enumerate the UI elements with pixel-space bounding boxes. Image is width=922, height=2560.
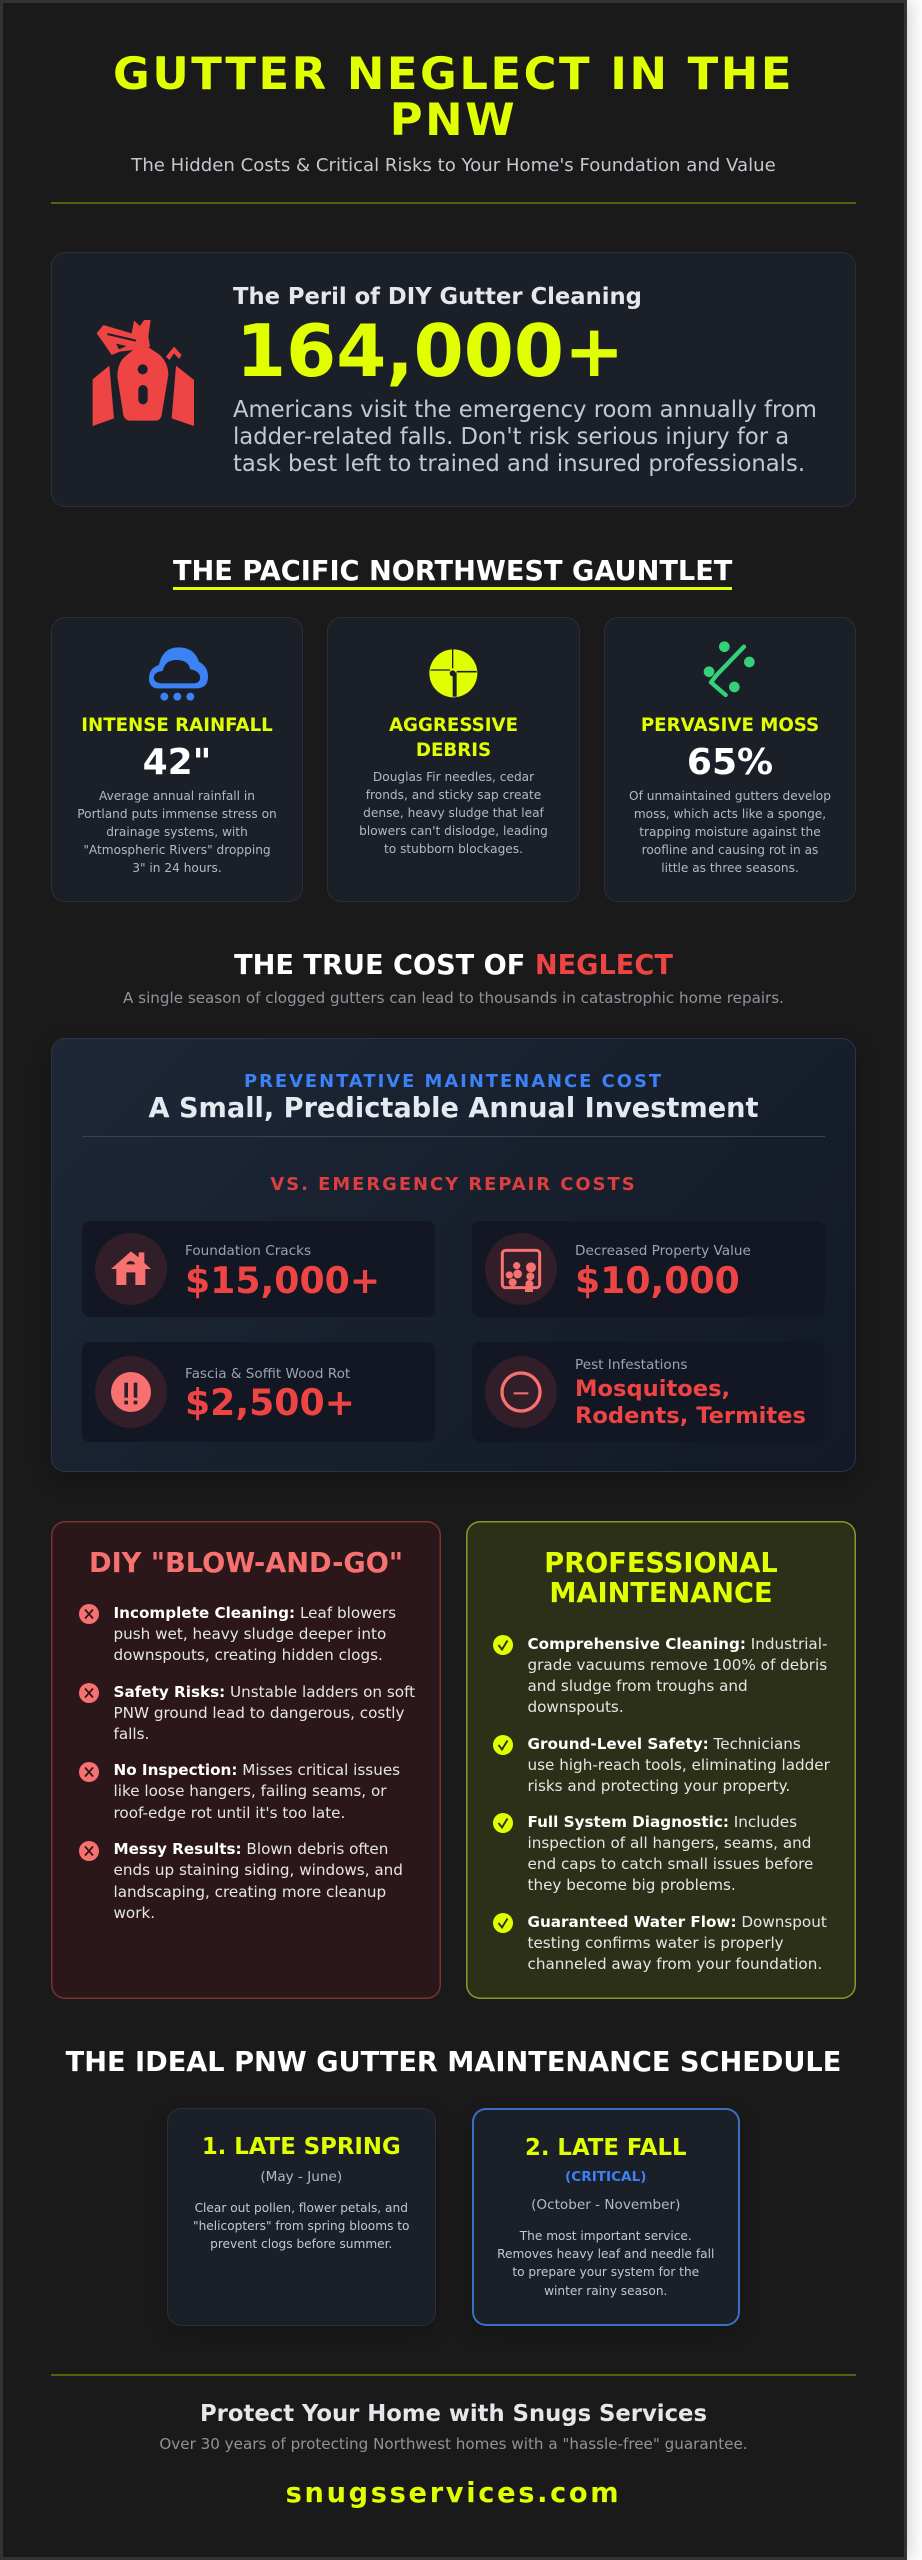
item text: Incomplete Cleaning: Leaf blowers (114, 1604, 396, 1622)
schedule text: "helicopters" from spring blooms to (193, 2219, 409, 2233)
item text: PNW ground lead to dangerous, costly (114, 1704, 405, 1722)
card text: trapping moisture against the (639, 825, 821, 839)
icon: falling ladder house (92, 320, 194, 426)
item text: testing confirms water is properly (528, 1934, 784, 1952)
schedule text: The most important service. (520, 2229, 692, 2243)
footer website: snugsservices.com (286, 2478, 621, 2509)
card title: PERVASIVE MOSS (641, 715, 819, 736)
item text: downspouts, creating hidden clogs. (114, 1646, 383, 1664)
heading: Pacific Northwest Gauntlet: THE PACIFIC NORTHWEST GAUNTLET (173, 556, 732, 587)
tile label: Pest Infestations (575, 1357, 687, 1373)
item: safety risks (79, 1682, 415, 1743)
item text: falls. (114, 1725, 149, 1743)
card text: Of unmaintained gutters develop (629, 789, 831, 803)
item: full system diagnostic (493, 1812, 813, 1894)
schedule months: (May - June) (260, 2169, 342, 2185)
hero text: Americans visit the emergency room annually from (233, 396, 817, 422)
title (113, 47, 794, 146)
card text (359, 770, 548, 856)
item text: No Inspection: Misses critical issues (114, 1761, 400, 1779)
item text: Full System Diagnostic: Includes (528, 1812, 797, 1830)
panel: intense rainfall (51, 617, 303, 902)
investment headline: A Small, Predictable Annual Investment (148, 1093, 759, 1124)
icon: moss (704, 641, 755, 698)
tile label: Foundation Cracks (185, 1243, 311, 1259)
item text (114, 1682, 415, 1743)
item text: Guaranteed Water Flow: Downspout (528, 1912, 827, 1930)
icon: pinwheel debris (429, 649, 478, 698)
item text: Ground-Level Safety: Technicians (528, 1734, 801, 1752)
card text: dense, heavy sludge that leaf (363, 806, 544, 820)
tile value: Rodents, Termites (575, 1403, 806, 1429)
item text (114, 1604, 396, 1664)
card text: little as three seasons. (661, 861, 799, 875)
icon: check (493, 1913, 513, 1933)
card text: roofline and causing rot in as (642, 843, 818, 857)
icon: check (493, 1735, 513, 1755)
hero text: ladder-related falls. Don't risk serious injury for a (233, 424, 789, 450)
schedule text: prevent clogs before summer. (210, 2237, 392, 2251)
hero heading: The Peril of DIY Gutter Cleaning (233, 284, 642, 310)
tile value: $10,000 (575, 1259, 740, 1302)
card text: blowers can't dislodge, leading (359, 824, 548, 838)
tile: property value (472, 1221, 825, 1317)
panel heading: PROFESSIONAL (544, 1548, 778, 1578)
footer text: Over 30 years of protecting Northwest homes with a "hassle-free" guarantee. (159, 2435, 748, 2453)
item text (114, 1761, 400, 1822)
icon: check (493, 1635, 513, 1655)
schedule text: Clear out pollen, flower petals, and (195, 2201, 408, 2215)
icon: check (493, 1813, 513, 1833)
schedule text (472, 2227, 740, 2300)
item text: like loose hangers, failing seams, or (114, 1782, 386, 1800)
item text: grade vacuums remove 100% of debris (528, 1656, 827, 1674)
card text: Portland puts immense stress on (77, 807, 277, 821)
tile: pests (472, 1342, 825, 1442)
panel: pervasive moss (604, 617, 856, 902)
panel heading: MAINTENANCE (549, 1578, 773, 1608)
item text: landscaping, creating more cleanup (114, 1883, 386, 1901)
schedule title: 2. LATE FALL (525, 2135, 687, 2161)
schedule months: (October - November) (531, 2197, 680, 2213)
tile value: Mosquitoes, (575, 1376, 730, 1402)
icon: rain cloud (149, 647, 208, 701)
card text: 3" in 24 hours. (132, 861, 222, 875)
icon: house (95, 1233, 167, 1305)
item text: they become big problems. (528, 1876, 736, 1894)
card text: Douglas Fir needles, cedar (373, 770, 534, 784)
tile label: Decreased Property Value (575, 1243, 751, 1259)
item text (528, 1634, 827, 1716)
footer heading: Protect Your Home with Snugs Services (200, 2401, 707, 2427)
item text: channeled away from your foundation. (528, 1955, 822, 1973)
card title (389, 715, 518, 760)
schedule text (167, 2199, 436, 2254)
hero number: 164,000+ (236, 309, 624, 393)
preventative label: PREVENTATIVE MAINTENANCE COST (244, 1071, 663, 1092)
item text: Messy Results: Blown debris often (114, 1840, 388, 1858)
heading: true cost of neglect: THE TRUE COST OF NEGLECT (234, 950, 673, 981)
item text (528, 1812, 813, 1894)
item text: downspouts. (528, 1698, 624, 1716)
tile value: $2,500+ (185, 1381, 355, 1424)
tile value: $15,000+ (185, 1259, 380, 1302)
card text: to stubborn blockages. (384, 842, 523, 856)
item: ground-level safety (493, 1734, 830, 1795)
schedule text: Removes heavy leaf and needle fall (497, 2247, 714, 2261)
schedule text: winter rainy season. (544, 2284, 667, 2298)
item text: and sludge from troughs and (528, 1677, 748, 1695)
panel heading: DIY "BLOW-AND-GO" (89, 1548, 403, 1578)
schedule title: 1. LATE SPRING (202, 2134, 401, 2160)
item: guaranteed water flow (493, 1912, 827, 1973)
item: no inspection (79, 1761, 400, 1822)
heading: maintenance schedule: THE IDEAL PNW GUTTER MAINTENANCE SCHEDULE (66, 2047, 841, 2078)
icon: property value (485, 1233, 557, 1305)
schedule text: to prepare your system for the (512, 2265, 699, 2279)
card text: fronds, and sticky sap create (366, 788, 541, 802)
item text: inspection of all hangers, seams, and (528, 1834, 811, 1852)
card text: "Atmospheric Rivers" dropping (83, 843, 271, 857)
card title: INTENSE RAINFALL (81, 715, 273, 736)
panel: cost comparison (51, 1038, 856, 1472)
card stat: 65% (687, 742, 773, 783)
item: comprehensive cleaning (493, 1634, 827, 1716)
title: GUTTER NEGLECT IN THE (113, 47, 794, 100)
card text (629, 789, 831, 875)
item text: end caps to catch small issues before (528, 1855, 813, 1873)
card text (77, 789, 277, 875)
panel: aggressive debris (327, 617, 580, 902)
panel: DIY peril hero (51, 252, 856, 507)
card title: AGGRESSIVE (389, 715, 518, 736)
icon: cross (79, 1762, 99, 1782)
item text: work. (114, 1904, 155, 1922)
panel: late spring (167, 2108, 436, 2326)
card text: drainage systems, with (106, 825, 248, 839)
card stat: 42" (143, 742, 211, 783)
item text: roof-edge rot until it's too late. (114, 1804, 345, 1822)
panel heading (544, 1548, 778, 1608)
icon: alert (95, 1356, 167, 1428)
panel: professional maintenance (466, 1521, 856, 1999)
card text: moss, which acts like a sponge, (634, 807, 826, 821)
section subtitle: A single season of clogged gutters can lead to thousands in catastrophic home repairs. (123, 989, 784, 1007)
title: PNW (390, 92, 517, 146)
tile: wood rot (82, 1342, 435, 1442)
panel: late fall (472, 2108, 740, 2326)
item text: risks and protecting your property. (528, 1777, 790, 1795)
item text: Comprehensive Cleaning: Industrial- (528, 1634, 827, 1652)
icon: no entry (485, 1356, 557, 1428)
item text: ends up staining siding, windows, and (114, 1861, 403, 1879)
panel: DIY blow-and-go (51, 1521, 441, 1999)
item text: use high-reach tools, eliminating ladder (528, 1756, 830, 1774)
item text: push wet, heavy sludge deeper into (114, 1625, 386, 1643)
icon: cross (79, 1841, 99, 1861)
card title: DEBRIS (416, 740, 491, 760)
item text (528, 1912, 827, 1975)
item: messy results (79, 1840, 403, 1922)
item text: Safety Risks: Unstable ladders on soft (114, 1682, 415, 1700)
tile: foundation cracks (82, 1221, 435, 1317)
item text (114, 1840, 403, 1922)
tile label: Fascia & Soffit Wood Rot (185, 1366, 350, 1382)
icon: cross (79, 1604, 99, 1624)
subtitle: The Hidden Costs & Critical Risks to Your Home's Foundation and Value (131, 155, 776, 176)
emergency label: VS. EMERGENCY REPAIR COSTS (270, 1174, 637, 1195)
tile value (575, 1376, 806, 1429)
item text (528, 1734, 830, 1795)
hero text: task best left to trained and insured professionals. (233, 451, 805, 477)
item: incomplete cleaning (79, 1604, 396, 1664)
card text: Average annual rainfall in (99, 789, 255, 803)
icon: cross (79, 1683, 99, 1703)
critical tag: (CRITICAL) (565, 2169, 646, 2185)
hero text (233, 396, 817, 477)
